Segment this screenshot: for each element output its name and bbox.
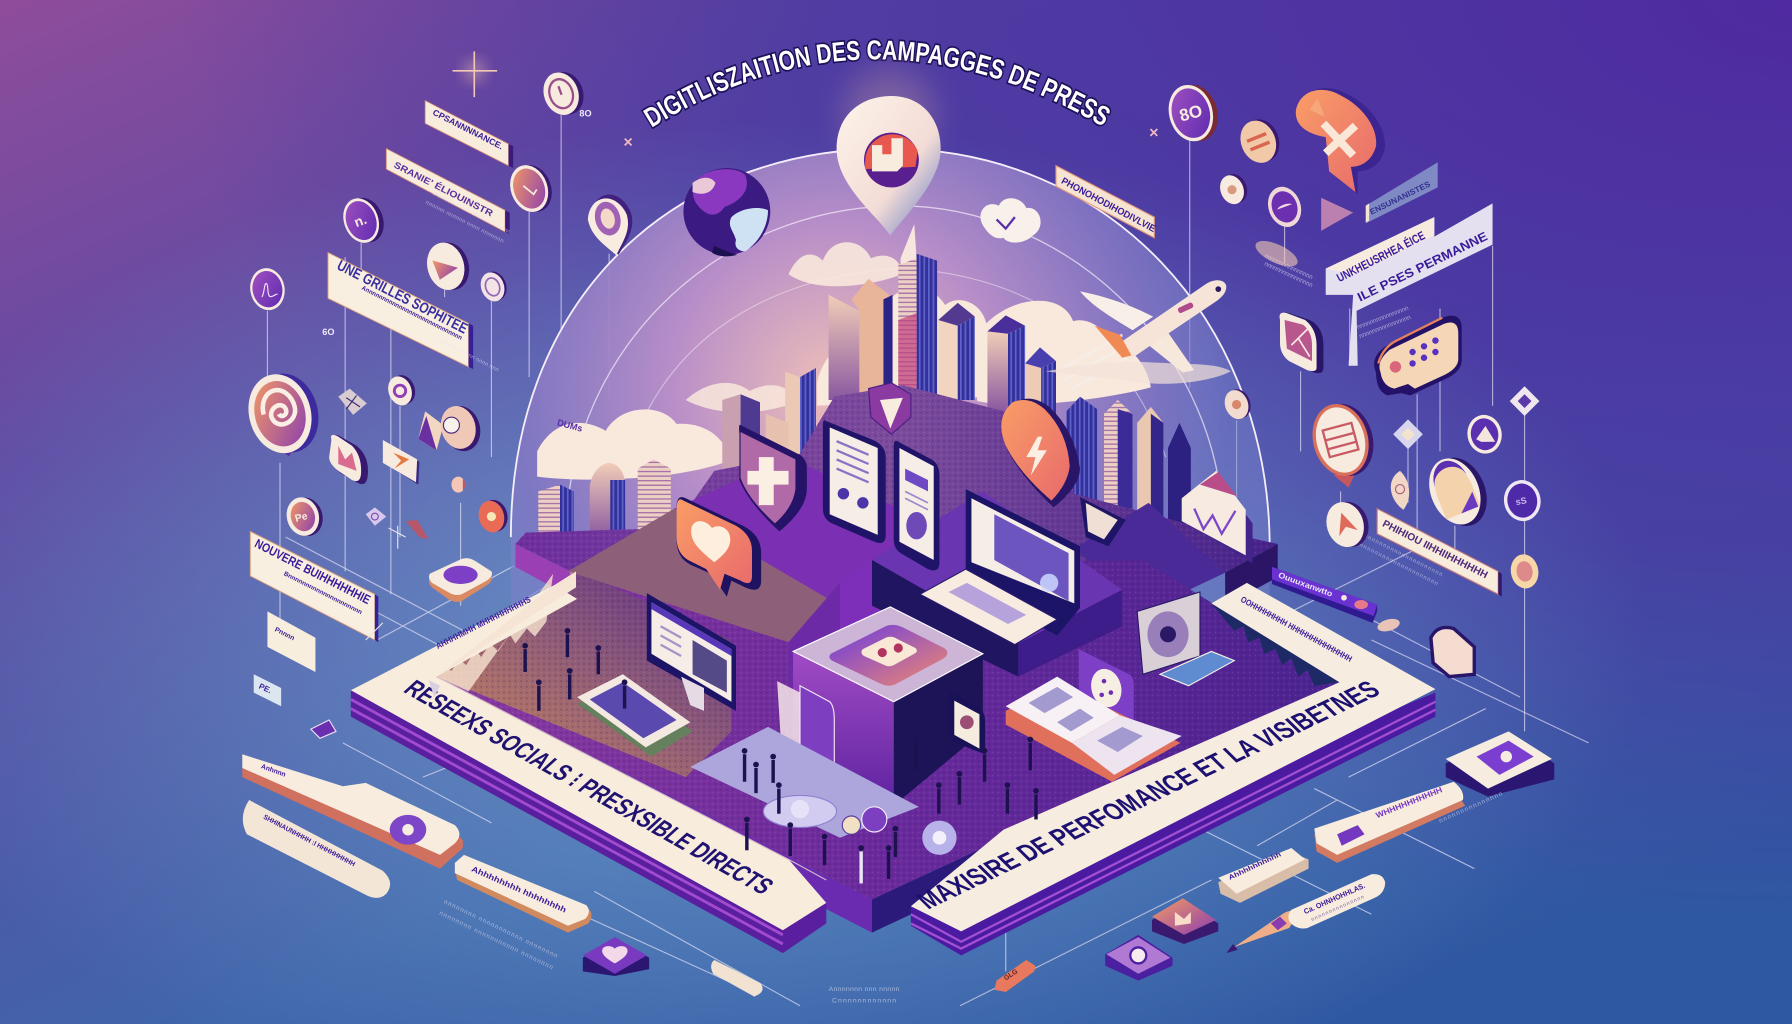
small white text blocks: nnnnnnnn nnnnnnnnnnn nnnnnnnn [438, 910, 554, 971]
decorative cross and spark top left: ✕ [623, 135, 633, 149]
label: bottom left tab with logo: Anhnnn [260, 763, 287, 779]
purple tablet icon [1079, 649, 1134, 727]
icon: leaf [1391, 471, 1409, 510]
label: large left banner: nnnnnnn nnnnn nnnn nnn [436, 337, 499, 373]
icons: small diamonds [1393, 386, 1539, 449]
decorative cross and spark top left: ✕ [1149, 126, 1159, 140]
icon: rounded square with road [1280, 313, 1323, 373]
label: right headline banner [1326, 203, 1493, 366]
small browser pin near W [1080, 497, 1126, 546]
small floating value labels left: 6O [322, 327, 334, 337]
label: lower right banner [1377, 509, 1502, 597]
cloud icon [980, 198, 1041, 243]
icon: 80 badge: 8O [1177, 100, 1204, 125]
icon: orange framed tile [1152, 898, 1218, 944]
icon: location pin cream [583, 190, 641, 260]
label: top left banner: CPSANNNNANCE. [431, 107, 505, 151]
easel with small laptop [1137, 592, 1234, 686]
icon: purple music badge [337, 192, 390, 249]
airplane with contrail [1046, 280, 1231, 389]
heart speech bubble [677, 497, 761, 597]
shield with cross [739, 425, 807, 531]
label: large left banner: Annnnnnnnnnnnnnnnnnnnnnnnnnnnn [360, 285, 463, 342]
crowd of small figures [522, 628, 1039, 883]
label: bottom left pill [243, 800, 390, 898]
small left cards: PE. [257, 682, 273, 695]
icon: pen badge [247, 265, 288, 313]
icon: play bubble [422, 237, 474, 295]
icon: cream tile with purple pill [429, 558, 492, 602]
label: top left banner [425, 101, 513, 168]
W card [1182, 471, 1253, 563]
small text under headline: nnnnnnnnnnnnnnnn [1263, 261, 1314, 289]
icon: stripe badge [1234, 114, 1285, 168]
icon: purple 5 badge [1501, 477, 1544, 524]
label: second left banner [386, 149, 511, 245]
decorative cross and spark top left [453, 51, 1159, 149]
small left cards [254, 611, 315, 706]
icon: small ring right [1216, 170, 1251, 208]
icon: diamond grey [338, 389, 367, 415]
icon: pink chevron tile [329, 435, 368, 484]
icon: orange A badge [1321, 496, 1374, 553]
icon: 80 badge [1162, 79, 1224, 147]
tag: orange label: GLG [1003, 968, 1019, 982]
icon: small pill and card [1376, 617, 1474, 677]
icon: purple eye badge [1263, 182, 1307, 232]
board: left caption band [351, 571, 826, 953]
icon: pen [1226, 911, 1298, 953]
laptop [920, 489, 1080, 645]
main purple terrain platform [437, 560, 1339, 933]
label: logo banner lower right: WHHHHHHHHHH [1375, 785, 1444, 820]
label: large left banner: UNE GRILLES SOPHITEE [334, 258, 470, 338]
label: pill lower right: Ca. OHNHOHHLAS. [1302, 881, 1367, 916]
label: second left banner: nnnnnn nnnnnn nnnn nnnnnnn [424, 200, 504, 245]
board: left caption band: RESEEXS SOCIALS ⁝ PRESXSIBLE DIRECTS [398, 676, 779, 899]
left field with orange ground [437, 570, 731, 777]
icon: peach diamond [451, 477, 466, 493]
label: pill lower centre right: Ahhhhhhhhhh [1228, 851, 1282, 882]
icon: purple 5 badge: sS [1515, 495, 1527, 507]
globe [683, 168, 770, 256]
label: second left banner: SRANIE' ÉLIOUINSTR [392, 160, 495, 219]
tile: dark card bottom right [1446, 731, 1554, 797]
label: second left banner: ununnnnnn nnnn unnnnnnn nnnnn [431, 191, 511, 236]
icon: orange round [475, 497, 511, 535]
orange lightning pin [1001, 399, 1080, 507]
label: bottom middle left banner: Ahhhhhhhh hhhhhhhh [470, 864, 568, 915]
central cube with app icon [793, 607, 983, 806]
title: DIGITLISZAITION DES CAMPAGGES DE PRESS [641, 38, 1112, 130]
back tower with spire [898, 224, 937, 394]
icon: purple framed tile [1105, 935, 1173, 981]
icon: dark arch badge [1420, 449, 1497, 535]
translucent easel panel and tablet [777, 681, 834, 777]
small text under headline: nnnnnnnnnnnnnnnnnnnnnn [1355, 540, 1439, 587]
icon: peach token right [1508, 552, 1541, 591]
small text under headline: nnnnnnnnnnnnnnnn [1263, 253, 1314, 281]
small phone centre [949, 691, 985, 754]
keyboard [577, 674, 693, 757]
dome with arcs [511, 149, 1270, 640]
silver stage with people [690, 727, 957, 855]
label: lower left banner [250, 531, 378, 642]
icon: envelope card [383, 440, 419, 485]
label: right headline banner: UNKHEUSRHEA ÉICE [1334, 227, 1427, 285]
big orange bubble with X [1296, 88, 1385, 194]
label: grey small banner: ENSUNANISTES [1368, 179, 1433, 217]
icon: small ring mid right [1221, 386, 1255, 422]
block: laptop block [872, 491, 1122, 677]
small text under headline: nnnnnnnnnnnnnnnnnnnnnn [1359, 531, 1443, 578]
small floating value labels left: 8O [579, 109, 592, 119]
tag: orange label [994, 960, 1035, 992]
label: purple button [1272, 567, 1377, 623]
skyline buildings [538, 224, 1191, 538]
central location pin [837, 69, 941, 235]
icon: PE badge [282, 493, 327, 541]
label: bottom middle left banner [455, 855, 591, 933]
label: bottom left pill: SHHINAUNHHHH :I HHHHHHHHH [262, 814, 356, 868]
icon: small dart floor [311, 680, 451, 738]
smartphone two [894, 441, 939, 570]
small text near right banner: nnnnnnnnnnnnnnn [1438, 790, 1504, 825]
small text under headline: nnnnnnnnnnnnnnnn [1358, 314, 1412, 340]
treeline left [437, 574, 553, 691]
small white text blocks: Annnnnnn nnn nnnnn [829, 986, 900, 993]
label: small cream pill [711, 960, 763, 997]
small text under headline [1263, 253, 1443, 587]
icon: orange badge [504, 159, 558, 218]
icon: document pin [1305, 396, 1384, 493]
smartphone one [823, 420, 886, 543]
board: right caption band: OOHHHHHHHH HHHHHHHHHHHHHH [1239, 594, 1354, 664]
board: left caption band: AHHHHMHH MHHHHHHHHHS [434, 594, 533, 651]
icon: large spiral pin [240, 365, 328, 464]
icon: purple mountain badge [1464, 412, 1505, 456]
icon: small ring [477, 268, 511, 305]
icon: heart tile [583, 937, 649, 976]
icon: tiny tiles left [366, 507, 429, 640]
label: purple button: Ouuuxanwtto [1277, 571, 1334, 599]
label: pill lower right: nnnnnnnnnnnnnnn [1310, 894, 1365, 923]
small white text blocks [438, 898, 900, 1004]
central hill terrain block [515, 385, 1278, 731]
label: lower left banner: Bnnnnnnnnnnnnnnnnnnnnn [283, 570, 363, 616]
label: right headline banner: ILE PSES PERMANNE [1355, 229, 1490, 304]
label: top centre-right banner: PHONOHODIHODIVLVIE [1059, 176, 1158, 235]
label: lower right banner: PHIHIOU IIHHIIHHHHHH [1380, 519, 1489, 581]
icon: ring badge top [538, 66, 589, 121]
board: right caption band: MAXISIRE DE PERFOMANCE ET LA VISIBETNES [910, 675, 1386, 914]
right forest [1211, 603, 1339, 686]
open book [1006, 677, 1182, 782]
icon: rounded app tile [829, 625, 947, 686]
label: bottom left tab with logo [242, 754, 463, 869]
icon: purple music badge: n. [352, 212, 369, 230]
small left cards: Pnnnn [273, 626, 296, 642]
clouds [537, 242, 1151, 480]
icon: small spiral [384, 372, 419, 409]
small white text blocks: Cnnnnnnnnnnnn [832, 997, 896, 1004]
connector lines and floor grid [267, 114, 1589, 1006]
icon: PE badge: Pe [294, 511, 309, 525]
block: heart tile block [568, 457, 960, 714]
label: grey small banner [1366, 162, 1438, 223]
small shield pin on hill [869, 383, 911, 434]
small floating value labels left: DUMs [556, 417, 584, 434]
label: pill lower centre right [1218, 848, 1309, 903]
icon: mauve triangle [1321, 198, 1353, 231]
small floating value labels left [322, 109, 592, 434]
label: lower left banner: NOUVERE BUIHHHHHHIE [252, 536, 373, 607]
small white text blocks: nnnnnnnn nnnnnnnnnnn nnnnnnnn [443, 898, 559, 960]
blurred pill icon [1252, 236, 1301, 272]
desktop monitor [647, 593, 736, 711]
label: logo banner lower right [1314, 782, 1465, 863]
label: pill lower right [1288, 874, 1385, 928]
small text under headline: nnnnnnnnnnnnnnnn [1356, 305, 1410, 331]
chat bubble with dots [1374, 316, 1462, 395]
icon: pyramid and clock [418, 402, 485, 455]
